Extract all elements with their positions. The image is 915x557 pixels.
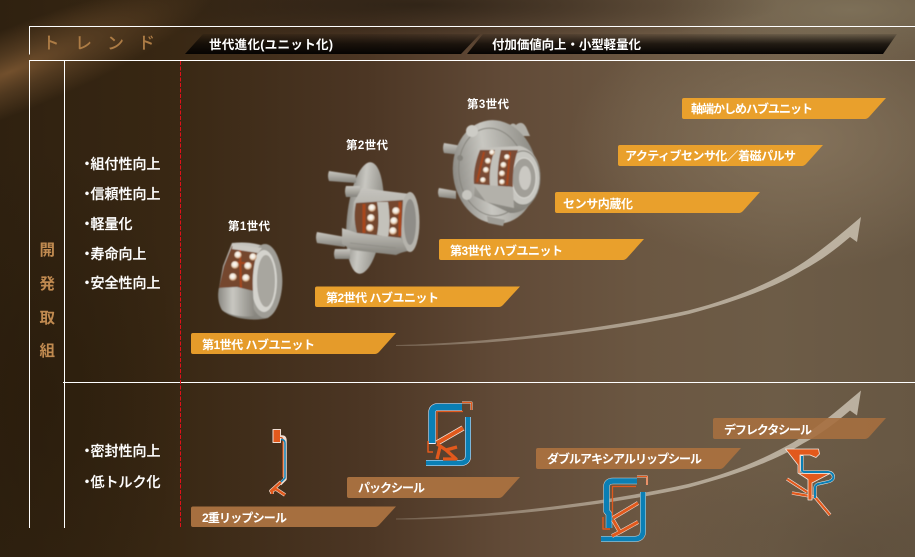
seal: double lip — [271, 430, 285, 495]
list: hub unit goals: ・ — [80, 246, 94, 262]
label: built-in sensor: センサ内蔵化 — [563, 196, 633, 211]
vertical heading: 開発取組: 開 — [40, 241, 55, 259]
label: deflector seal — [713, 418, 886, 439]
header bar: trend — [185, 34, 897, 54]
label: 3rd gen hub: 第3世代 ハブユニット — [450, 243, 563, 258]
list: seal goals — [80, 443, 160, 490]
label: 2nd gen hub: 第2世代 ハブユニット — [326, 290, 439, 305]
label: pack seal — [347, 477, 520, 498]
list: seal goals: 密封性向上 — [90, 443, 160, 459]
list: seal goals: ・ — [80, 443, 94, 459]
label: double lip seal: 2重リップシール — [202, 510, 287, 525]
heading: トレンド: ン — [107, 34, 124, 53]
vertical heading: 開発取組: 発 — [40, 275, 56, 293]
caption: 3rd gen: 第3世代 — [467, 97, 510, 111]
arrow: seal trend — [396, 390, 861, 520]
label: active sensor: アクティブセンサ化／着磁パルサ — [625, 148, 796, 163]
label: pack seal: パックシール — [358, 481, 425, 495]
list: hub unit goals: 寿命向上 — [90, 246, 146, 262]
header text: generation evolution: 世代進化(ユニット化) — [209, 37, 333, 52]
seal: double axial lip — [601, 476, 647, 539]
list: hub unit goals: ・ — [80, 156, 94, 172]
list: seal goals: ・ — [80, 474, 94, 490]
label: double axial lip seal — [536, 448, 741, 469]
list: hub unit goals: 安全性向上 — [90, 275, 160, 291]
vertical heading: 開発取組: 組 — [40, 342, 56, 360]
label: 1st gen hub: 第1世代 ハブユニット — [202, 337, 315, 352]
label: built-in sensor — [555, 192, 760, 213]
label: double lip seal — [191, 506, 396, 527]
label: 2nd gen hub — [315, 286, 520, 307]
label: deflector seal: デフレクタシール — [724, 422, 812, 437]
list: hub unit goals: 信頼性向上 — [90, 186, 160, 202]
vertical heading: 開発取組: 取 — [40, 310, 56, 327]
label: active sensor — [618, 145, 823, 166]
arrow: hub unit trend — [396, 217, 861, 346]
header text: added value: 付加価値向上・小型軽量化 — [492, 37, 641, 52]
illustration: 3rd gen hub — [438, 115, 544, 229]
caption: 2nd gen: 第2世代 — [346, 138, 388, 152]
heading: トレンド: ト — [42, 34, 60, 53]
list: hub unit goals: ・ — [80, 216, 94, 232]
illustration: 2nd gen hub — [316, 160, 420, 276]
label: shaft-end crimp — [682, 98, 886, 119]
list: hub unit goals — [80, 156, 160, 291]
heading: トレンド — [42, 34, 155, 53]
seal: deflector — [786, 449, 834, 515]
list: hub unit goals: 組付性向上 — [90, 156, 160, 172]
vertical heading: 開発取組 — [40, 241, 56, 360]
label: 1st gen hub — [191, 333, 396, 354]
illustration: 1st gen bearing — [218, 242, 282, 320]
list: seal goals: 低トルク化 — [90, 474, 160, 490]
list: hub unit goals: ・ — [80, 275, 94, 291]
list: hub unit goals: 軽量化 — [90, 216, 132, 232]
caption: 1st gen: 第1世代 — [228, 219, 270, 233]
heading: トレンド: レ — [75, 34, 92, 53]
seal: pack — [426, 402, 472, 463]
heading: トレンド: ド — [138, 34, 155, 53]
label: shaft-end crimp: 軸端かしめハブユニット — [691, 101, 813, 116]
label: double axial lip seal: ダブルアキシアルリップシール — [547, 451, 702, 466]
label: 3rd gen hub — [439, 239, 644, 260]
list: hub unit goals: ・ — [80, 186, 94, 202]
